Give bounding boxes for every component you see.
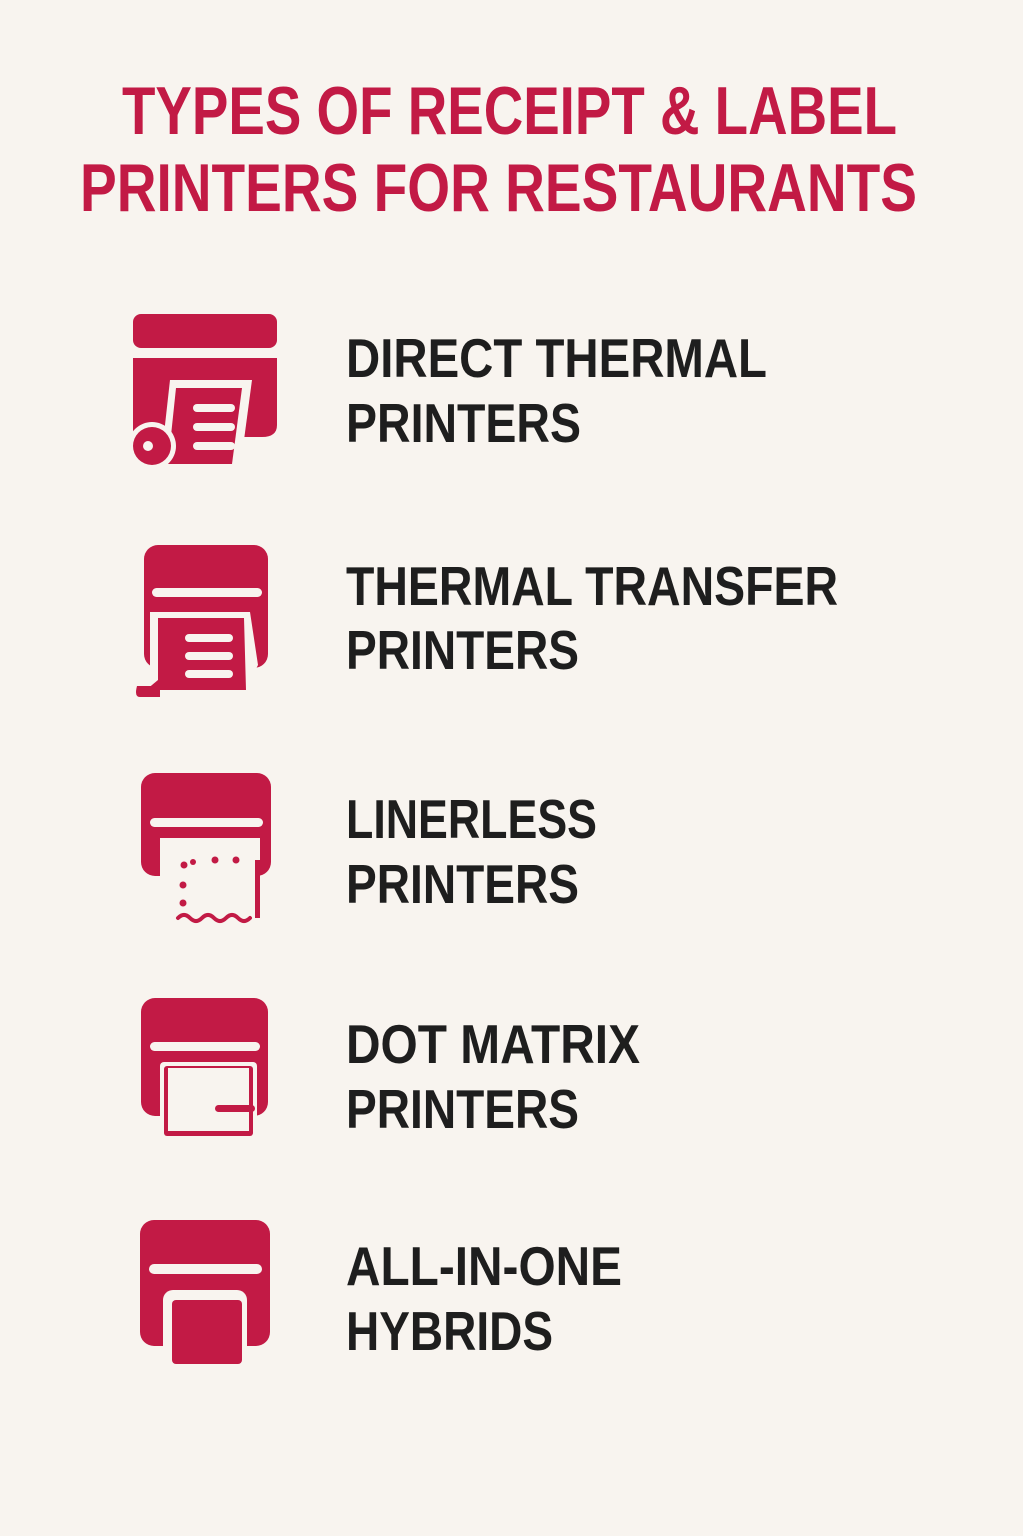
label: direct thermal: [346, 327, 767, 454]
label: all-in-one hybrids: ALL-IN-ONE: [346, 1235, 622, 1297]
label: dot matrix: [346, 1013, 640, 1140]
icon: all-in-one hybrid printer: [140, 1220, 270, 1370]
icon: direct thermal printer: [128, 314, 277, 470]
icon: dot matrix printer: [141, 998, 268, 1142]
label: direct thermal: DIRECT THERMAL: [346, 327, 767, 389]
icon: linerless printer: [141, 773, 271, 921]
label: thermal transfer: THERMAL TRANSFER: [346, 555, 838, 617]
label: all-in-one hybrids: HYBRIDS: [346, 1300, 553, 1362]
label: linerless: LINERLESS: [346, 788, 597, 850]
label: dot matrix: PRINTERS: [346, 1078, 579, 1140]
label: all-in-one hybrids: [346, 1235, 622, 1362]
label: thermal transfer: PRINTERS: [346, 619, 579, 681]
title: [80, 73, 917, 226]
icon: thermal transfer printer: [134, 545, 268, 700]
label: linerless: [346, 788, 597, 915]
label: direct thermal: PRINTERS: [346, 392, 581, 454]
label: thermal transfer: [346, 555, 838, 681]
label: dot matrix: DOT MATRIX: [346, 1013, 640, 1075]
label: linerless: PRINTERS: [346, 853, 579, 915]
